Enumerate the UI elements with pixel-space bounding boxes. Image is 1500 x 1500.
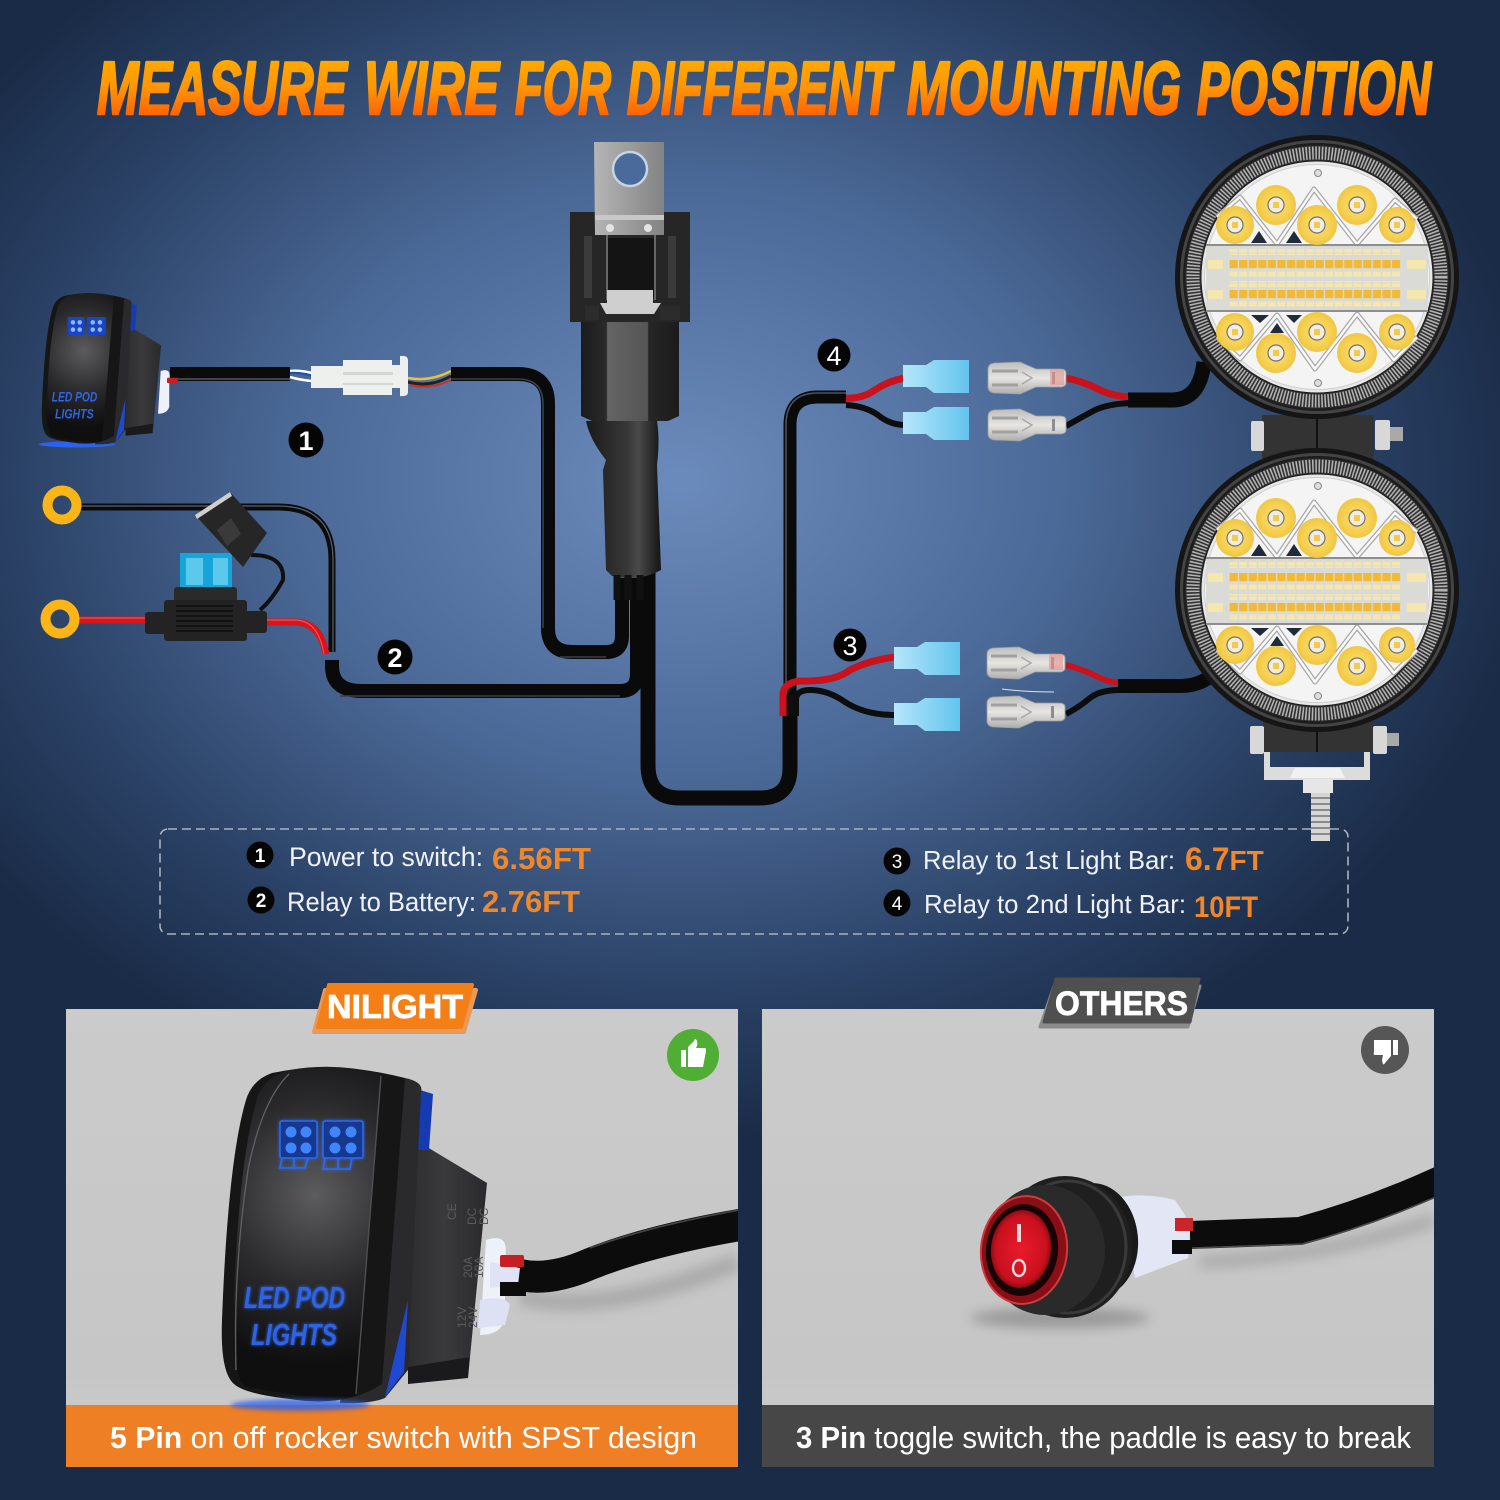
ring terminals [46, 490, 76, 634]
terminals: upper pair [903, 360, 1066, 441]
mount bracket lower with bolt [1250, 722, 1399, 793]
large rocker switch: DC [465, 1207, 479, 1225]
number badge 4: 4 [826, 341, 842, 371]
wire 1: switch to relay [170, 371, 622, 657]
caption band [762, 1405, 1434, 1467]
wire 3: relay to light bars [648, 362, 1218, 798]
panel: wire length legend [160, 793, 1348, 934]
large rocker switch: DC [477, 1207, 491, 1225]
OTHERS badge: OTHERS [1055, 985, 1188, 1023]
title: DIFFERENT [627, 46, 895, 130]
legend item 3: Relay to 1st Light Bar: [923, 845, 1175, 875]
large rocker switch: 10A [472, 1257, 486, 1278]
large rocker switch: 24V [466, 1307, 480, 1328]
legend item 2 [248, 884, 580, 919]
switch label: LIGHTS [251, 1317, 337, 1352]
legend item 1 [246, 841, 591, 876]
switch icon: LED lights [280, 1121, 363, 1169]
large rocker switch: 12V [455, 1307, 469, 1328]
number badge 4 [818, 338, 850, 372]
toggle switch [976, 1176, 1193, 1318]
number badge 2 [378, 640, 412, 674]
wiring harness [75, 362, 1218, 798]
connector: two-pin plug [311, 356, 408, 396]
small rocker switch: LED POD [52, 389, 97, 405]
bolt [1311, 793, 1330, 841]
number badge 2: 2 [387, 643, 403, 673]
number badge 1: 1 [298, 426, 314, 456]
title: MOUNTING [907, 46, 1181, 130]
legend item 1: 1 [255, 846, 266, 867]
small rocker switch: LIGHTS [55, 405, 94, 421]
caption band: 3 Pin toggle switch, the paddle is easy to break [796, 1420, 1411, 1455]
number badge 1 [288, 422, 324, 458]
switch label [244, 1280, 345, 1352]
large rocker switch: CE [445, 1203, 459, 1220]
large rocker switch [222, 1067, 526, 1403]
legend item 4: 10FT [1194, 891, 1258, 924]
legend item 4: 4 [892, 894, 903, 915]
LED pod light: lower [1175, 448, 1459, 732]
legend item 2: 2 [256, 891, 266, 912]
legend item 4 [884, 889, 1258, 924]
switch label: LED POD [244, 1280, 345, 1315]
large rocker switch: 20A [461, 1257, 475, 1278]
title: FOR [515, 46, 611, 130]
NILIGHT badge: NILIGHT [327, 988, 463, 1025]
legend item 1: 6.56FT [492, 841, 591, 876]
inline fuse holder [145, 492, 283, 641]
wire [1190, 1180, 1440, 1262]
panel: other toggle switch [762, 1009, 1440, 1467]
legend item 2: Relay to Battery: [287, 887, 476, 917]
legend item 2: 2.76FT [482, 884, 580, 919]
legend item 1: Power to switch: [289, 842, 483, 872]
caption band [66, 1405, 738, 1467]
icon: thumbs up [667, 1029, 719, 1081]
wire 2: relay to battery [75, 506, 637, 696]
terminals: lower pair [894, 642, 1065, 731]
caption band: 5 Pin on off rocker switch with SPST design [110, 1420, 697, 1455]
legend item 3 [884, 841, 1264, 877]
title: WIRE [364, 46, 500, 130]
panel: NILIGHT rocker switch [66, 1009, 745, 1467]
title: MEASURE [97, 46, 348, 130]
legend item 4: Relay to 2nd Light Bar: [924, 889, 1186, 919]
number badge 3 [834, 628, 866, 662]
icon: thumbs down [1361, 1026, 1409, 1074]
small rocker switch [39, 293, 178, 448]
legend item 3: 3 [892, 852, 902, 873]
mount bracket upper [1251, 415, 1403, 460]
number badge 3: 3 [842, 631, 858, 661]
relay [570, 142, 690, 600]
large wire [505, 1210, 745, 1302]
LED pod light: upper [1175, 135, 1459, 419]
NILIGHT badge [314, 985, 476, 1032]
legend item 3: 6.7FT [1185, 841, 1264, 877]
